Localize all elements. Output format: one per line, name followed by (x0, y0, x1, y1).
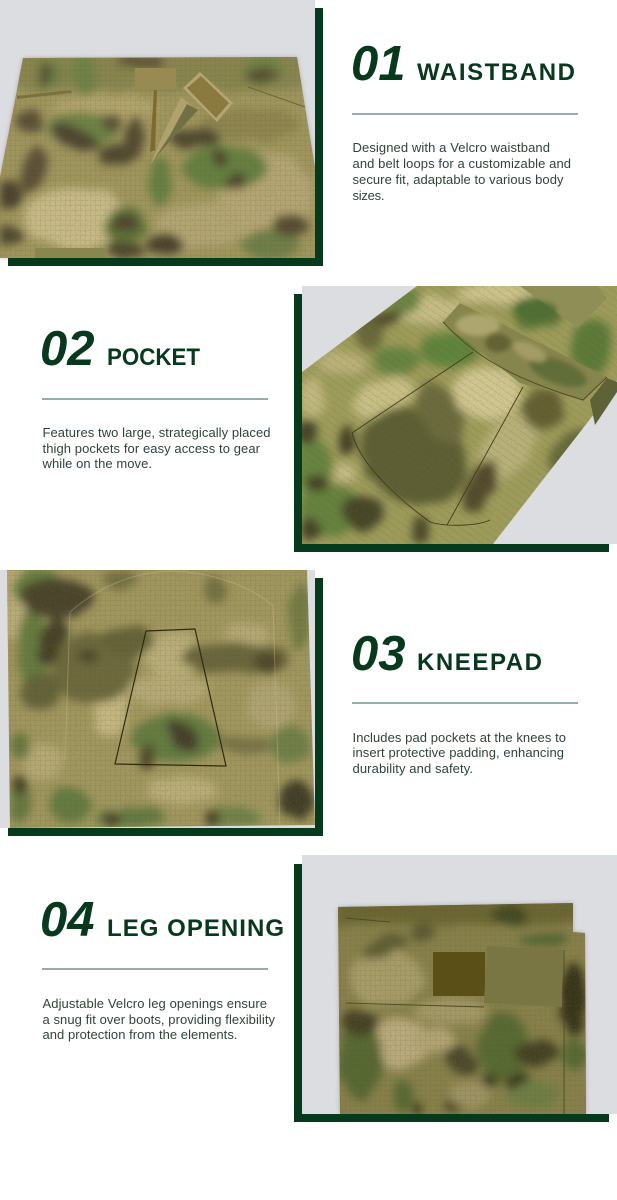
text: leg opening description: a snug fit over boots, providing flexibility (42, 1012, 276, 1027)
lower pocket seams (352, 352, 523, 525)
text: waistband description: sizes. (352, 188, 384, 203)
heading: 03 kneepad: KNEEPAD (417, 649, 542, 676)
velcro flap (484, 946, 563, 1007)
text: waistband description: Designed with a Velcro waistband (352, 140, 550, 155)
heading: 04 leg opening: 04 (40, 893, 95, 947)
text: leg opening description: and protection from the elements. (42, 1027, 238, 1042)
heading: 04 leg opening: LEG OPENING (107, 915, 284, 942)
heading: 01 waistband: WAISTBAND (417, 59, 575, 86)
velcro tab (183, 72, 233, 122)
heading: 03 kneepad (351, 627, 542, 681)
heading: 03 kneepad: 03 (351, 627, 406, 681)
heading: 02 pocket: 02 (40, 322, 95, 376)
velcro patch (433, 952, 485, 996)
text: pocket description (42, 425, 270, 471)
panel: waistband photo (0, 0, 320, 260)
text: leg opening description: Adjustable Velcro leg openings ensure (42, 996, 267, 1011)
frame: leg opening (294, 864, 609, 1122)
frame: kneepad (8, 578, 323, 836)
heading: 02 pocket: POCKET (107, 344, 200, 371)
open fly (17, 87, 305, 165)
panel: leg opening photo (302, 855, 617, 1116)
text: leg opening description (42, 996, 276, 1042)
heading: 04 leg opening (40, 893, 284, 947)
pad pocket opening (115, 629, 226, 766)
hem fold line (346, 918, 564, 1114)
text: kneepad description: Includes pad pockets at the knees to (352, 730, 566, 745)
frame: waistband (8, 8, 323, 266)
text: pocket description: while on the move. (42, 456, 152, 471)
panel: kneepad photo (0, 568, 320, 830)
pocket flap (443, 303, 607, 400)
text: waistband description: and belt loops for a customizable and (352, 156, 571, 171)
heading: 01 waistband (351, 37, 575, 91)
waistband velcro strip (135, 68, 176, 89)
text: waistband description (352, 140, 571, 203)
panel: pocket photo (295, 281, 617, 546)
text: waistband description: secure fit, adaptable to various body (352, 172, 564, 187)
text: pocket description: Features two large, strategically placed (42, 425, 270, 440)
text: kneepad description: insert protective padding, enhancing (352, 745, 564, 760)
frame: pocket (294, 294, 609, 552)
heading: 02 pocket (40, 322, 200, 376)
heading: 01 waistband: 01 (351, 37, 406, 91)
text: kneepad description (352, 730, 566, 776)
text: pocket description: thigh pockets for easy access to gear (42, 441, 261, 456)
upper flap (517, 286, 607, 328)
text: kneepad description: durability and safety. (352, 761, 473, 776)
knee pad outline (65, 571, 280, 828)
